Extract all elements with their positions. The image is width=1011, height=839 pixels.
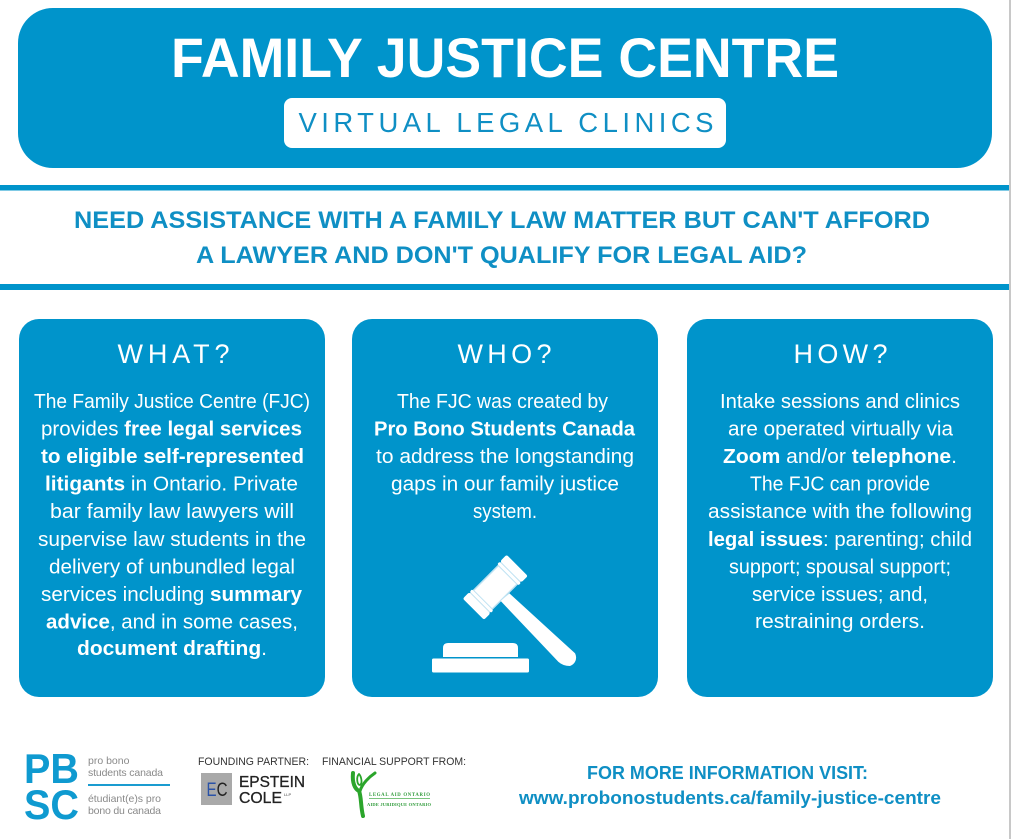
logo: PBSC: bono du canada bbox=[88, 805, 161, 817]
headline question: A LAWYER AND DON'T QUALIFY FOR LEGAL AID? bbox=[196, 242, 807, 269]
logo: PBSC: SC bbox=[24, 781, 79, 828]
text block: who: The FJC was created by bbox=[397, 391, 608, 413]
text block: what: supervise law students in the bbox=[38, 529, 306, 551]
text block: what: bar family law lawyers will bbox=[50, 501, 294, 523]
headline question bbox=[74, 207, 930, 269]
panel: who bbox=[352, 319, 658, 697]
text block: what: delivery of unbundled legal bbox=[49, 556, 295, 578]
logo: PBSC: pro bono bbox=[88, 755, 130, 767]
more information call to action: FOR MORE INFORMATION VISIT: bbox=[587, 763, 868, 783]
text block: what: to eligible self-represented bbox=[41, 446, 304, 468]
text block: how: assistance with the following bbox=[708, 501, 972, 523]
logo: financial support Legal Aid Ontario: AIDE JURIDIQUE ONTARIO bbox=[367, 802, 431, 807]
text block: who: system. bbox=[473, 501, 537, 523]
text block: how bbox=[708, 391, 972, 633]
logo: financial support Legal Aid Ontario: LEGAL AID ONTARIO bbox=[369, 793, 430, 798]
text block: how: support; spousal support; bbox=[729, 556, 951, 578]
text block: who: Pro Bono Students Canada bbox=[374, 418, 636, 440]
subtitle box bbox=[284, 98, 726, 148]
logo: financial support Legal Aid Ontario: FINANCIAL SUPPORT FROM: bbox=[322, 756, 466, 768]
logo: PBSC bbox=[24, 745, 170, 828]
text block: what: The Family Justice Centre (FJC) bbox=[34, 391, 310, 413]
text block: what: litigants in Ontario. Private bbox=[45, 474, 298, 496]
text block: how: service issues; and, bbox=[752, 584, 928, 606]
headline question: NEED ASSISTANCE WITH A FAMILY LAW MATTER BUT CAN'T AFFORD bbox=[74, 207, 930, 234]
text block: how: legal issues: parenting; child bbox=[708, 529, 972, 551]
logo: founding partner Epstein Cole: LLP bbox=[284, 792, 291, 797]
text block: who: gaps in our family justice bbox=[391, 474, 619, 496]
panel: how bbox=[687, 319, 993, 697]
icon: gavel bbox=[432, 555, 576, 672]
logo: founding partner Epstein Cole: FOUNDING PARTNER: bbox=[198, 756, 309, 768]
heading: how: HOW? bbox=[794, 339, 888, 369]
logo: founding partner Epstein Cole: EPSTEIN bbox=[239, 774, 305, 791]
subtitle box: VIRTUAL LEGAL CLINICS bbox=[298, 107, 714, 138]
logo: financial support Legal Aid Ontario bbox=[322, 756, 466, 816]
text block: what: services including summary bbox=[41, 584, 303, 606]
logo: founding partner Epstein Cole: COLE bbox=[239, 790, 282, 807]
more information call to action bbox=[518, 763, 941, 808]
panel: what bbox=[19, 319, 325, 697]
text block: what bbox=[34, 391, 310, 660]
logo: founding partner Epstein Cole bbox=[198, 756, 309, 807]
text block: what: provides free legal services bbox=[41, 418, 302, 440]
text block: how: Zoom and/or telephone. bbox=[723, 446, 957, 468]
text block: how: restraining orders. bbox=[755, 611, 925, 633]
header banner bbox=[18, 8, 992, 168]
more information call to action: www.probonostudents.ca/family-justice-centre bbox=[518, 788, 941, 808]
text block: what: advice, and in some cases, bbox=[46, 612, 298, 634]
text block: who: to address the longstanding bbox=[376, 446, 634, 468]
text block: how: The FJC can provide bbox=[750, 474, 930, 496]
title: FAMILY JUSTICE CENTRE bbox=[171, 26, 839, 89]
heading: who: WHO? bbox=[458, 339, 552, 369]
logo: PBSC: étudiant(e)s pro bbox=[88, 793, 161, 805]
text block: how: are operated virtually via bbox=[728, 418, 954, 440]
logo: PBSC: PB bbox=[24, 745, 79, 792]
text block: who bbox=[374, 391, 636, 523]
logo: founding partner Epstein Cole: EC bbox=[206, 780, 228, 801]
text block: what: document drafting . bbox=[77, 638, 267, 660]
heading: what: WHAT? bbox=[118, 339, 230, 369]
logo: PBSC: students canada bbox=[88, 767, 163, 779]
text block: how: Intake sessions and clinics bbox=[720, 391, 960, 413]
